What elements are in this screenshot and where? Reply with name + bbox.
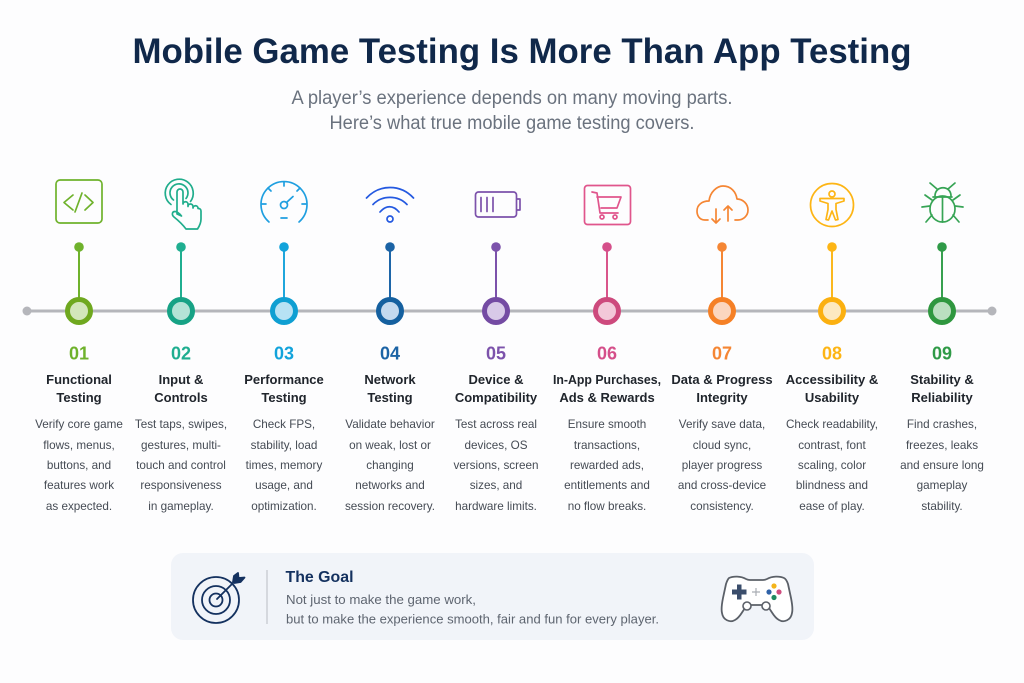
marker 8	[820, 242, 844, 322]
heading: Network	[364, 372, 416, 387]
heading: Stability &	[910, 372, 974, 387]
description: versions, screen	[453, 459, 539, 472]
description: freezes, leaks	[906, 439, 978, 452]
heading	[910, 372, 974, 405]
description: optimization.	[251, 500, 317, 513]
subtitle: Here’s what true mobile game testing covers.	[330, 113, 694, 134]
marker 1	[68, 242, 90, 322]
description: as expected.	[46, 500, 112, 513]
description: no flow breaks.	[568, 500, 646, 513]
goal text: Not just to make the game work,	[286, 592, 476, 607]
icon: gauge	[261, 182, 307, 222]
description: in gameplay.	[148, 500, 214, 513]
description: stability.	[921, 500, 963, 513]
icon: battery	[476, 192, 520, 217]
description: features work	[44, 479, 114, 492]
description: Check FPS,	[253, 418, 315, 431]
heading	[553, 372, 661, 405]
heading	[364, 372, 416, 405]
description: player progress	[682, 459, 762, 472]
number 09: 09	[932, 344, 952, 364]
description: on weak, lost or	[349, 439, 431, 452]
marker 7	[710, 242, 734, 322]
description: gestures, multi-	[141, 439, 221, 452]
divider	[266, 570, 268, 624]
heading: In-App Purchases,	[553, 372, 661, 387]
heading: Performance	[244, 372, 324, 387]
number 06: 06	[597, 344, 617, 364]
marker 3	[272, 242, 296, 322]
column 8: Accessibility & Usability	[786, 184, 878, 513]
heading: Accessibility &	[786, 372, 878, 387]
column 5: Device & Compatibility	[453, 192, 539, 513]
description: ease of play.	[799, 500, 865, 513]
description: and cross-device	[678, 479, 766, 492]
subtitle	[292, 88, 732, 134]
marker 5	[484, 242, 508, 322]
number 07: 07	[712, 344, 732, 364]
heading	[244, 372, 324, 405]
column 9: Stability & Reliability	[900, 183, 984, 513]
description: scaling, color	[798, 459, 866, 472]
description: buttons, and	[47, 459, 111, 472]
column 7: Data & Progress Integrity	[671, 186, 773, 513]
number 04: 04	[380, 344, 400, 364]
heading: Compatibility	[455, 390, 538, 405]
heading	[786, 372, 878, 405]
icon: wifi	[366, 188, 414, 222]
icon: accessibility person	[810, 184, 854, 226]
description: Verify save data,	[679, 418, 765, 431]
description: Test across real	[455, 418, 537, 431]
description: contrast, font	[798, 439, 867, 452]
heading: Input &	[159, 372, 203, 387]
description: Test taps, swipes,	[135, 418, 227, 431]
number 01: 01	[69, 344, 89, 364]
description	[135, 418, 227, 513]
description	[246, 418, 322, 513]
column 4: Network Testing	[345, 188, 435, 513]
heading: Testing	[367, 390, 413, 405]
timeline line	[22, 306, 996, 316]
goal text	[286, 592, 659, 626]
description	[786, 418, 878, 513]
description: usage, and	[255, 479, 313, 492]
heading	[154, 372, 208, 405]
heading	[455, 372, 538, 405]
description: entitlements and	[564, 479, 650, 492]
heading: Usability	[805, 390, 860, 405]
description: consistency.	[690, 500, 754, 513]
description	[345, 418, 435, 513]
description: and ensure long	[900, 459, 984, 472]
icon: target with arrow	[193, 573, 244, 623]
description: responsiveness	[140, 479, 222, 492]
marker 6	[596, 242, 618, 322]
marker 2	[170, 242, 192, 322]
description: cloud sync,	[693, 439, 751, 452]
heading: Reliability	[911, 390, 973, 405]
description	[900, 418, 984, 513]
description: hardware limits.	[455, 500, 537, 513]
icon: game controller	[722, 577, 792, 621]
goal heading: The Goal	[286, 569, 354, 586]
description: Find crashes,	[907, 418, 977, 431]
description: blindness and	[796, 479, 868, 492]
subtitle: A player’s experience depends on many moving parts.	[292, 88, 732, 109]
number 08: 08	[822, 344, 842, 364]
column 2: Input & Controls	[135, 179, 227, 513]
description	[678, 418, 766, 513]
heading: Integrity	[696, 390, 748, 405]
description	[35, 418, 123, 513]
goal text: but to make the experience smooth, fair and fun for every player.	[286, 612, 659, 626]
marker 9	[930, 242, 954, 322]
description: stability, load	[251, 439, 317, 452]
heading: Controls	[154, 390, 208, 405]
heading	[671, 372, 773, 405]
description: transactions,	[574, 439, 640, 452]
icon: shopping cart	[584, 186, 630, 224]
heading: Device &	[469, 372, 523, 387]
heading: Functional	[46, 372, 112, 387]
description: rewarded ads,	[570, 459, 644, 472]
heading: Ads & Rewards	[559, 390, 655, 405]
icon: touch hand	[165, 179, 201, 229]
description: touch and control	[136, 459, 226, 472]
icon: code	[56, 180, 102, 223]
description: Ensure smooth	[568, 418, 646, 431]
icon: cloud sync	[697, 186, 748, 223]
marker 4	[378, 242, 402, 322]
heading: Testing	[261, 390, 307, 405]
description: flows, menus,	[43, 439, 115, 452]
icon: bug	[922, 183, 963, 222]
heading: Testing	[56, 390, 102, 405]
description	[453, 418, 539, 513]
description: changing	[366, 459, 414, 472]
number 05: 05	[486, 344, 506, 364]
description: devices, OS	[464, 439, 528, 452]
description: times, memory	[246, 459, 322, 472]
title: Mobile Game Testing Is More Than App Testing	[132, 32, 912, 71]
panel: the goal	[171, 553, 814, 640]
column 1: Functional Testing	[35, 180, 123, 513]
description	[564, 418, 650, 513]
heading	[46, 372, 112, 405]
number 02: 02	[171, 344, 191, 364]
column 6: In-App Purchases	[553, 186, 661, 513]
description: Check readability,	[786, 418, 878, 431]
description: session recovery.	[345, 500, 435, 513]
description: Verify core game	[35, 418, 123, 431]
description: gameplay	[917, 479, 967, 492]
description: networks and	[355, 479, 425, 492]
column 3: Performance Testing	[244, 182, 324, 513]
description: Validate behavior	[345, 418, 435, 431]
heading: Data & Progress	[671, 372, 773, 387]
number 03: 03	[274, 344, 294, 364]
description: sizes, and	[470, 479, 522, 492]
